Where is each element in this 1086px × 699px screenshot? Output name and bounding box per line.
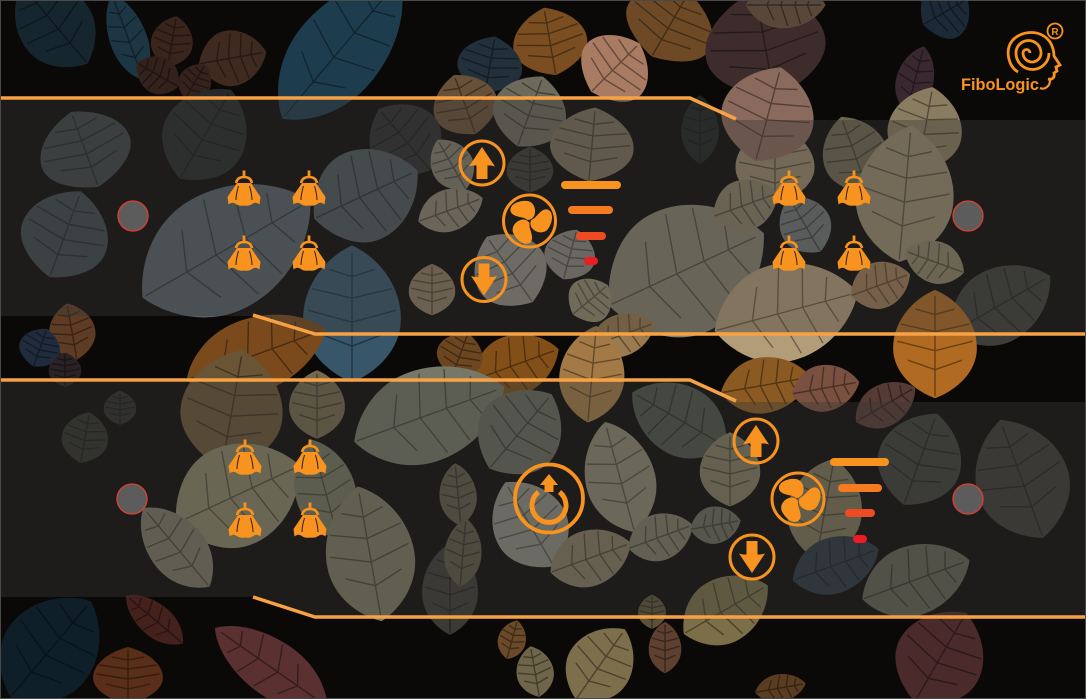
panel: upper translucent band: [0, 100, 1086, 334]
panel 2 right indicator: [953, 484, 983, 514]
lower band top line: [0, 380, 736, 401]
logo: FiboLogic: FiboLogic: [961, 76, 1039, 94]
bottom leaves: [0, 571, 127, 699]
band 1 filler leaves: [144, 69, 267, 200]
panel: lower translucent band: [0, 382, 1086, 617]
icon: panel 1 arrow up button: [460, 141, 504, 185]
icon: panel 2 arrow up button: [734, 419, 778, 463]
panel 2 fan speed bars: [830, 458, 889, 543]
band 1 leaves: [27, 96, 142, 203]
panel 1 right bell icons: [772, 170, 870, 271]
band 2 leaves: [171, 341, 293, 477]
icon: panel 1 arrow down button: [462, 258, 506, 302]
panel 1 right indicator: [953, 201, 983, 231]
icon: panel 2 arrow down button: [730, 535, 774, 579]
panel 2 bell icons: [228, 440, 326, 538]
middle leaves: [44, 299, 100, 364]
icon: panel 2 fan button: [772, 473, 825, 526]
logo: FiboLogic: R: [1051, 27, 1059, 38]
icon: panel 1 fan button: [504, 195, 556, 248]
panel 2 left indicator: [117, 484, 147, 514]
upper band bottom line: [253, 315, 1086, 334]
icon: power button: [515, 464, 583, 532]
logo: FiboLogic: [961, 24, 1062, 94]
panel 1 left bell icons: [228, 170, 326, 271]
lower band bottom line: [253, 597, 1086, 617]
panel 1 fan speed bars: [561, 181, 621, 265]
upper band top line: [0, 98, 736, 119]
panel 1 left indicator: [118, 201, 148, 231]
